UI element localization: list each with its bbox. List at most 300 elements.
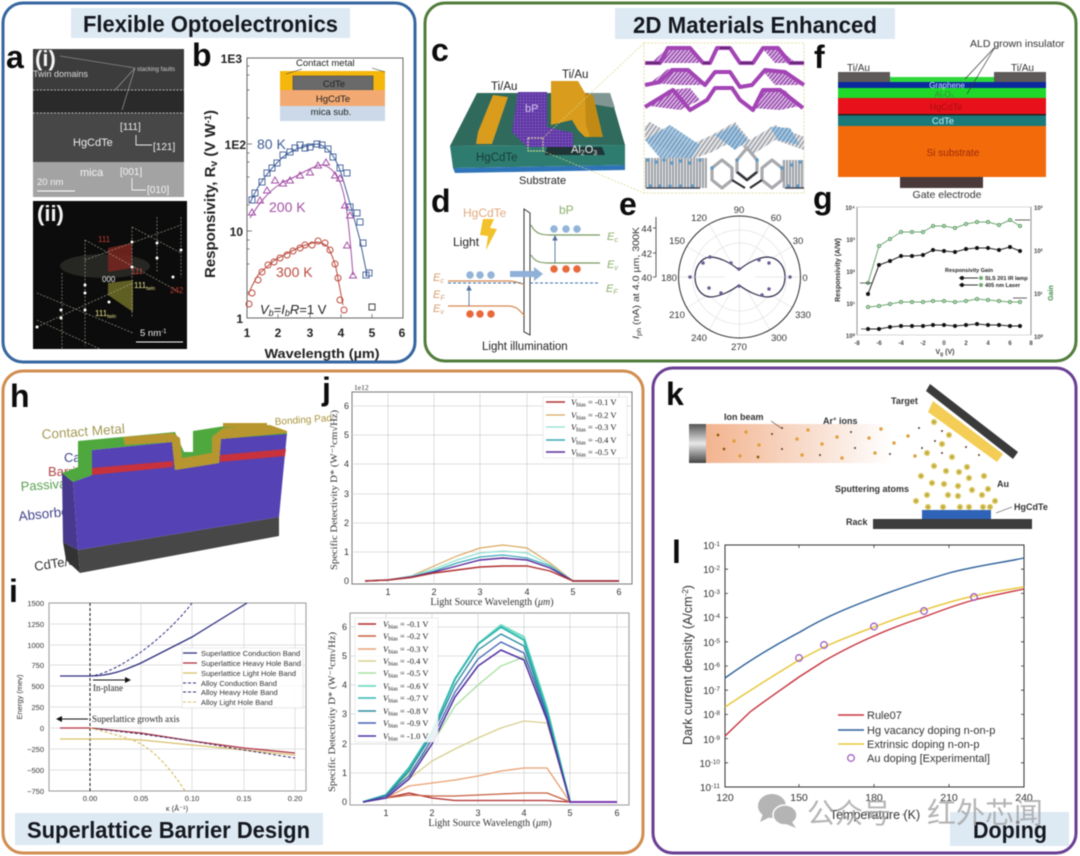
legend j bottom: V bbox=[383, 706, 390, 716]
legend j bottom: V bbox=[383, 731, 390, 741]
detectivity chart: top: 4 bbox=[524, 587, 530, 597]
panel label d: d bbox=[431, 183, 451, 219]
band structure chart i: 0.20 bbox=[288, 794, 302, 803]
sputtering schematic k: Ar bbox=[823, 416, 833, 426]
band structure chart i: 0.10 bbox=[185, 794, 199, 803]
legend j bottom: = -0.7 V bbox=[398, 693, 429, 703]
inset: device stack bbox=[280, 58, 385, 121]
polar plot e: 120 bbox=[691, 213, 707, 224]
dark current chart l: -8 bbox=[714, 710, 720, 717]
responsivity and gain chart g: Responsivity (A/W) bbox=[835, 238, 842, 302]
legend j bottom: = -0.6 V bbox=[398, 681, 429, 691]
legend j bottom: = -0.9 V bbox=[398, 718, 429, 728]
responsivity chart: 10 bbox=[230, 225, 243, 239]
responsivity chart: 4 bbox=[338, 326, 345, 340]
legend l: Au doping [Experimental] bbox=[867, 753, 990, 765]
responsivity and gain chart g: 10⁴ bbox=[845, 206, 855, 212]
watermark: WeChat official account: 公众号 bbox=[807, 798, 891, 829]
polar plot e: I bbox=[631, 336, 642, 339]
responsivity and gain chart g: 10³ bbox=[1034, 205, 1043, 212]
detectivity chart: bottom: Specific Detectivity D* (W⁻¹cm√Hz) bbox=[327, 632, 338, 792]
legend j top: = -0.4 V bbox=[586, 435, 617, 445]
responsivity and gain chart g: g bbox=[940, 352, 943, 358]
sputtering schematic k: Ion beam bbox=[724, 412, 764, 422]
legend j top: = -0.3 V bbox=[586, 422, 617, 432]
polar plot e: 42 bbox=[641, 249, 652, 260]
responsivity and gain chart g: Gain bbox=[1048, 285, 1055, 301]
sputtering schematic k: Target bbox=[891, 396, 918, 406]
device schematic c: Al bbox=[571, 144, 581, 156]
band structure chart i: −500 bbox=[27, 766, 44, 775]
dark current chart l: 10 bbox=[703, 662, 714, 673]
band structure chart i: 0.00 bbox=[83, 794, 97, 803]
responsivity chart: (V W bbox=[203, 123, 219, 161]
band diagram d: E bbox=[607, 259, 614, 271]
layer schematic h: CdTe/Si bbox=[33, 552, 81, 574]
device stack f: CdTe bbox=[932, 116, 954, 127]
zinc-blende HgCdTe lattice bbox=[645, 122, 804, 188]
band structure chart i: 1500 bbox=[27, 599, 44, 608]
dark current chart l: 10 bbox=[703, 686, 714, 697]
responsivity and gain chart g: 2 bbox=[964, 341, 968, 347]
panel label j: j bbox=[321, 371, 331, 407]
series: 300 K: 300 K bbox=[276, 264, 313, 280]
layer schematic h bbox=[18, 413, 332, 574]
legend j top: bias bbox=[576, 416, 587, 422]
device schematic c: HgCdTe bbox=[476, 152, 518, 164]
legend j bottom: V bbox=[383, 693, 390, 703]
responsivity and gain chart g: 0 bbox=[942, 341, 946, 347]
sputtering schematic k: HgCdTe bbox=[1014, 502, 1048, 512]
device stack f: O bbox=[944, 90, 951, 99]
responsivity and gain chart g: V bbox=[935, 349, 940, 356]
legend j bottom: V bbox=[383, 644, 390, 654]
device schematic c bbox=[450, 43, 644, 193]
detectivity chart: top: Light Source Wavelength (μm) bbox=[430, 597, 554, 608]
detectivity chart: top: 2 bbox=[344, 518, 349, 528]
micrograph a(i): TEM cross-section bbox=[33, 46, 184, 197]
band diagram d: v bbox=[614, 265, 618, 272]
dark current chart l: 120 bbox=[716, 792, 734, 804]
heading: Superlattice Barrier Design: Superlattice Barrier Design bbox=[27, 817, 310, 843]
series: Rule07 bbox=[725, 589, 1024, 736]
legend j top: bias bbox=[576, 402, 587, 408]
device stack f: Al bbox=[935, 90, 942, 99]
atomic structure inset bbox=[644, 43, 804, 193]
icon: WeChat bubbles bbox=[758, 794, 797, 828]
micrograph a(i): TEM cross-section: [010] bbox=[147, 185, 169, 196]
responsivity and gain chart g: 10¹ bbox=[846, 301, 855, 308]
series: Hg vacancy doping bbox=[725, 558, 1024, 678]
polar plot e: 330 bbox=[795, 310, 811, 321]
device schematic c: 3 bbox=[593, 150, 597, 157]
micrograph a(i): TEM cross-section: [121] bbox=[153, 142, 175, 153]
band diagram d: v bbox=[440, 309, 444, 316]
device stack f: Ti/Au bbox=[847, 63, 870, 74]
legend j bottom: bias bbox=[388, 674, 399, 680]
responsivity chart: ) bbox=[203, 110, 219, 115]
condition label: = bbox=[274, 302, 281, 317]
polar plot e: ph bbox=[636, 328, 643, 336]
sputtering schematic k: ions bbox=[837, 416, 858, 426]
dark current chart l: 10 bbox=[703, 589, 714, 600]
band structure chart i bbox=[15, 599, 306, 813]
legend i: Superlattice Light Hole Band bbox=[201, 669, 296, 678]
watermark: WeChat official account: · bbox=[900, 803, 907, 825]
dark current chart l: 10 bbox=[703, 735, 714, 746]
device schematic c: bP bbox=[525, 103, 538, 115]
legend j bottom bbox=[355, 618, 438, 742]
legend i: Alloy Light Hole Band bbox=[201, 698, 273, 707]
responsivity and gain chart g: 4 bbox=[986, 341, 990, 347]
micrograph a(i): TEM cross-section: HgCdTe bbox=[73, 137, 113, 149]
detectivity chart: top: 5 bbox=[570, 587, 576, 597]
band diagram d: c bbox=[614, 237, 618, 244]
legend i: Alloy Conduction Band bbox=[201, 679, 277, 688]
band diagram d: c bbox=[440, 278, 444, 285]
legend j bottom: = -0.2 V bbox=[398, 631, 429, 641]
condition label: =1 V bbox=[299, 302, 327, 317]
device stack f: HgCdTe bbox=[930, 102, 962, 112]
layer schematic h: Absorber bbox=[18, 503, 74, 524]
condition label: R bbox=[290, 302, 299, 317]
detectivity chart: bottom: 5 bbox=[567, 808, 573, 818]
micrograph a(i): TEM cross-section: mica bbox=[80, 167, 104, 179]
legend j bottom: bias bbox=[388, 650, 399, 656]
detectivity chart: top: Specific Detectivity D* (W⁻¹cm√Hz) bbox=[329, 410, 340, 570]
detectivity chart: top: 0 bbox=[344, 576, 349, 586]
device stack f: Ti/Au bbox=[1011, 63, 1034, 74]
responsivity and gain chart g: 405 nm Laser bbox=[985, 283, 1021, 289]
detectivity chart: bottom: 6 bbox=[614, 808, 620, 818]
responsivity and gain chart g: 10² bbox=[846, 269, 855, 276]
band diagram d: E bbox=[433, 272, 440, 284]
polar plot e: 180 bbox=[661, 273, 677, 284]
legend j bottom: V bbox=[383, 619, 390, 629]
legend i bbox=[182, 648, 303, 708]
dark current chart l: 240 bbox=[1015, 792, 1033, 804]
responsivity and gain chart g: -2 bbox=[920, 341, 926, 347]
legend j top: V bbox=[571, 435, 578, 445]
device stack f: Graphene bbox=[929, 81, 965, 90]
polar plot e: 210 bbox=[669, 310, 685, 321]
detectivity chart: top: 6 bbox=[344, 401, 349, 411]
legend j bottom: V bbox=[383, 681, 390, 691]
condition label: b bbox=[285, 308, 290, 318]
band structure chart i: 750 bbox=[31, 661, 44, 670]
legend j top: V bbox=[571, 422, 578, 432]
band diagram d: Light bbox=[453, 235, 480, 249]
detectivity chart: top: 1e12 bbox=[354, 383, 369, 392]
heading: Flexible Optoelectronics: Flexible Optoelectronics bbox=[83, 11, 338, 37]
dark current chart l: -11 bbox=[711, 783, 720, 790]
micrograph a(ii): diffraction pattern: 242 bbox=[170, 286, 184, 295]
detectivity chart: bottom: 3 bbox=[342, 709, 347, 719]
responsivity chart: Responsivity, R bbox=[203, 170, 219, 278]
heading: Doping: Doping bbox=[973, 817, 1047, 843]
micrograph a(ii): diffraction pattern: 111 bbox=[134, 281, 146, 290]
legend j bottom: = -0.3 V bbox=[398, 644, 429, 654]
panel: superlattice barrier design bbox=[3, 371, 643, 853]
detectivity chart: bottom: 2 bbox=[429, 808, 435, 818]
panel label e: e bbox=[619, 186, 637, 222]
micrograph a(ii): diffraction pattern: 5 nm bbox=[140, 328, 161, 339]
micrograph a(i): TEM cross-section: Twin domains bbox=[33, 69, 89, 79]
device stack f: 3 bbox=[951, 94, 954, 100]
device stack f: ALD grown insulator bbox=[970, 38, 1065, 50]
legend j top: = -0.5 V bbox=[586, 447, 617, 457]
panel label h: h bbox=[10, 378, 30, 414]
band structure chart i: In-plane bbox=[93, 683, 123, 693]
legend j top bbox=[543, 397, 627, 458]
responsivity and gain chart g: 10³ bbox=[846, 237, 855, 244]
polar plot e: 240 bbox=[691, 333, 707, 344]
band diagram d: bP bbox=[559, 203, 574, 217]
inset: device stack: Contact metal bbox=[296, 58, 355, 69]
micrograph a(i): TEM cross-section: [111] bbox=[120, 122, 141, 133]
legend j bottom: bias bbox=[388, 736, 399, 742]
micrograph a(ii): diffraction pattern: 000 bbox=[102, 275, 116, 284]
micrograph a(i): TEM cross-section: 20 nm bbox=[37, 177, 63, 188]
polar plot e: (nA) at 4.0 µm, 300K bbox=[631, 226, 642, 328]
sputtering schematic k: + bbox=[833, 417, 837, 423]
responsivity chart: 1E3 bbox=[221, 52, 242, 66]
dark current chart l: 10 bbox=[703, 613, 714, 624]
detectivity chart: top: 6 bbox=[616, 587, 622, 597]
heading: Doping bbox=[950, 812, 1069, 846]
detectivity chart: top: 2 bbox=[431, 587, 437, 597]
panel: doping bbox=[653, 368, 1076, 853]
series: extrinsic doping bbox=[725, 587, 1024, 707]
dark current chart l: 10 bbox=[699, 759, 711, 770]
detectivity chart: top: 1 bbox=[344, 547, 349, 557]
dark current chart l: 180 bbox=[865, 792, 883, 804]
dark current chart l: Dark current density (A/cm bbox=[681, 597, 695, 745]
panel label g: g bbox=[813, 180, 833, 216]
polar plot e: 150 bbox=[669, 236, 685, 247]
band structure chart i: 250 bbox=[31, 703, 44, 712]
layer schematic h: Barrier bbox=[48, 464, 88, 479]
responsivity chart: Wavelength (µm) bbox=[264, 346, 380, 361]
responsivity and gain chart g: 10¹ bbox=[1034, 291, 1043, 298]
dark current chart l: -2 bbox=[681, 589, 690, 596]
legend j bottom: V bbox=[383, 631, 390, 641]
responsivity and gain chart g: 6 bbox=[1008, 341, 1012, 347]
legend j top: = -0.1 V bbox=[586, 397, 617, 407]
legend j top: bias bbox=[576, 452, 587, 458]
band diagram d: E bbox=[607, 231, 614, 243]
dark current chart l bbox=[681, 541, 1033, 822]
series: 200 K: 200 K bbox=[269, 199, 306, 215]
band structure chart i: Superlattice growth axis bbox=[92, 714, 180, 724]
responsivity and gain chart g: -6 bbox=[876, 341, 882, 347]
responsivity chart: 6 bbox=[399, 326, 406, 340]
micrograph a(ii): diffraction pattern: twin bbox=[146, 286, 155, 292]
micrograph a(i): TEM cross-section: (i) bbox=[35, 46, 56, 71]
responsivity chart: 5 bbox=[369, 326, 376, 340]
polar plot e: 60 bbox=[771, 213, 781, 224]
band structure chart i: 500 bbox=[31, 682, 44, 691]
dark current chart l: 10 bbox=[703, 638, 714, 649]
detectivity chart: top bbox=[329, 383, 632, 608]
responsivity chart: -1 bbox=[203, 115, 213, 123]
detectivity chart: bottom bbox=[327, 613, 629, 829]
responsivity and gain chart g bbox=[835, 205, 1055, 358]
dark current chart l: 10 bbox=[703, 565, 714, 576]
dark current chart l: 10 bbox=[703, 710, 714, 721]
band structure chart i: 1000 bbox=[27, 641, 44, 650]
detectivity chart: bottom: Light Source Wavelength (μm) bbox=[428, 818, 552, 829]
condition label: I bbox=[281, 302, 285, 317]
device schematic c: O bbox=[585, 144, 594, 156]
panel label k: k bbox=[666, 376, 684, 412]
responsivity and gain chart g: (V) bbox=[943, 349, 955, 356]
sputtering schematic k: Au bbox=[997, 479, 1009, 489]
detectivity chart: bottom: 1 bbox=[383, 808, 389, 818]
inset: device stack: mica sub. bbox=[311, 107, 351, 118]
polar plot e: 300 bbox=[771, 333, 787, 344]
sputtering schematic k: Sputtering atoms bbox=[835, 484, 909, 494]
dark current chart l: -6 bbox=[714, 662, 720, 669]
legend j bottom: = -0.4 V bbox=[398, 656, 429, 666]
detectivity chart: top: 3 bbox=[477, 587, 483, 597]
legend j bottom: bias bbox=[388, 712, 399, 718]
legend j bottom: bias bbox=[388, 698, 399, 704]
series: 80 K bbox=[249, 136, 372, 278]
polar plot e: 30 bbox=[793, 236, 803, 247]
sputtering schematic k bbox=[689, 384, 1048, 529]
detectivity chart: bottom: 2 bbox=[342, 739, 347, 749]
panel label c: c bbox=[431, 32, 449, 68]
device stack f: 2 bbox=[942, 94, 945, 100]
legend j bottom: = -0.5 V bbox=[398, 668, 429, 678]
band diagram d: F bbox=[440, 295, 445, 302]
dark current chart l: 10 bbox=[700, 783, 711, 794]
band diagram d: E bbox=[433, 289, 440, 301]
micrograph a(ii): diffraction pattern: -1 bbox=[161, 329, 167, 335]
polar plot e: 270 bbox=[731, 342, 747, 353]
dark current chart l: 150 bbox=[790, 792, 808, 804]
series: 300 K bbox=[246, 238, 347, 313]
inset: device stack: HgCdTe bbox=[316, 94, 350, 105]
detectivity chart: top: 5 bbox=[344, 430, 349, 440]
dark current chart l: -5 bbox=[714, 638, 720, 645]
legend j top: V bbox=[571, 397, 578, 407]
layer schematic h: Passivation bbox=[20, 474, 88, 494]
band structure chart i: −250 bbox=[27, 745, 44, 754]
dark current chart l: Temperature (K) bbox=[830, 808, 920, 822]
responsivity and gain chart g: SLS 201 IR lamp bbox=[985, 276, 1028, 282]
band diagram d bbox=[433, 203, 618, 353]
dark current chart l: 10 bbox=[703, 541, 714, 552]
detectivity chart: top: 4 bbox=[344, 459, 349, 469]
device schematic c: 2 bbox=[581, 150, 585, 157]
polar plot e: 44 bbox=[641, 224, 652, 235]
dark current chart l: ) bbox=[681, 585, 695, 589]
responsivity and gain chart g: -4 bbox=[898, 341, 904, 347]
legend j bottom: = -0.1 V bbox=[398, 619, 429, 629]
band diagram d: Light illumination bbox=[482, 341, 568, 353]
detectivity chart: top: 1 bbox=[385, 587, 391, 597]
band structure chart i: 0 bbox=[40, 724, 44, 733]
micrograph a(ii): diffraction pattern: 111 bbox=[131, 267, 144, 276]
responsivity and gain chart g: -8 bbox=[854, 341, 860, 347]
micrograph a(ii): diffraction pattern: 111 bbox=[98, 235, 111, 244]
legend j top: = -0.2 V bbox=[586, 410, 617, 420]
legend j bottom: V bbox=[383, 668, 390, 678]
responsivity chart: 1E2 bbox=[225, 138, 246, 152]
band structure chart i: −750 bbox=[27, 787, 44, 796]
device stack f: Gate electrode bbox=[913, 189, 982, 201]
legend i: Alloy Heavy Hole Band bbox=[201, 688, 278, 697]
device schematic c: Substrate bbox=[519, 175, 566, 187]
dark current chart l: -4 bbox=[714, 613, 720, 620]
responsivity chart: v bbox=[209, 160, 220, 167]
responsivity chart: 1 bbox=[236, 312, 243, 326]
sputtering schematic k: Rack bbox=[846, 517, 869, 527]
icon: ion gun bbox=[689, 424, 706, 463]
micrograph a(ii): diffraction pattern: twin bbox=[107, 314, 116, 320]
panel label a: a bbox=[6, 39, 24, 75]
legend j top: V bbox=[571, 447, 578, 457]
dark current chart l: -2 bbox=[714, 565, 720, 572]
micrograph a(i): TEM cross-section: stacking faults bbox=[137, 67, 175, 73]
black phosphorus layers bbox=[645, 48, 804, 110]
panel label l: l bbox=[672, 534, 681, 570]
legend j bottom: V bbox=[383, 656, 390, 666]
band structure chart i: 0.15 bbox=[237, 794, 251, 803]
polar plot e: 90 bbox=[734, 205, 744, 216]
dark current chart l: -7 bbox=[714, 686, 720, 693]
legend j top: V bbox=[571, 410, 578, 420]
polar plot e: 40 bbox=[641, 273, 652, 284]
series: 200 K bbox=[248, 159, 356, 278]
legend j top: bias bbox=[576, 428, 587, 434]
heading: 2D Materials Enhanced: 2D Materials Enhanced bbox=[633, 12, 877, 38]
device schematic c: Ti/Au bbox=[491, 81, 517, 93]
responsivity chart: 3 bbox=[307, 326, 314, 340]
layer schematic h: Bonding Pad bbox=[274, 413, 332, 428]
condition label: V bbox=[260, 302, 270, 317]
detectivity chart: bottom: 1 bbox=[342, 768, 347, 778]
series: 80 K: 80 K bbox=[257, 136, 286, 152]
panel label f: f bbox=[814, 39, 825, 75]
responsivity chart: 1 bbox=[244, 326, 251, 340]
micrograph a(ii): diffraction pattern: (ii) bbox=[37, 201, 64, 226]
inset: device stack: CdTe bbox=[323, 79, 345, 90]
layer schematic h: Cap bbox=[64, 450, 88, 465]
band structure chart i: 0.05 bbox=[134, 794, 148, 803]
responsivity and gain chart g: Responsivity Gain bbox=[945, 268, 994, 274]
micrograph a(ii): diffraction pattern bbox=[33, 201, 187, 349]
outlier marker bbox=[369, 304, 375, 310]
detectivity chart: bottom: 0 bbox=[342, 797, 347, 807]
legend j bottom: = -1.0 V bbox=[398, 731, 429, 741]
detectivity chart: bottom: 5 bbox=[342, 651, 347, 661]
legend l: Hg vacancy doping n-on-p bbox=[867, 725, 995, 737]
device stack f: Si substrate bbox=[927, 148, 980, 159]
panel label b: b bbox=[192, 37, 212, 73]
legend l bbox=[838, 710, 995, 765]
legend j bottom: bias bbox=[388, 662, 399, 668]
legend j bottom: bias bbox=[388, 686, 399, 692]
micrograph a(i): TEM cross-section: [001] bbox=[120, 167, 142, 178]
legend j bottom: bias bbox=[388, 636, 399, 642]
detectivity chart: bottom: 4 bbox=[342, 680, 347, 690]
legend j bottom: V bbox=[383, 718, 390, 728]
legend j top: bias bbox=[576, 440, 587, 446]
micrograph a(ii): diffraction pattern: 111 bbox=[95, 309, 107, 318]
